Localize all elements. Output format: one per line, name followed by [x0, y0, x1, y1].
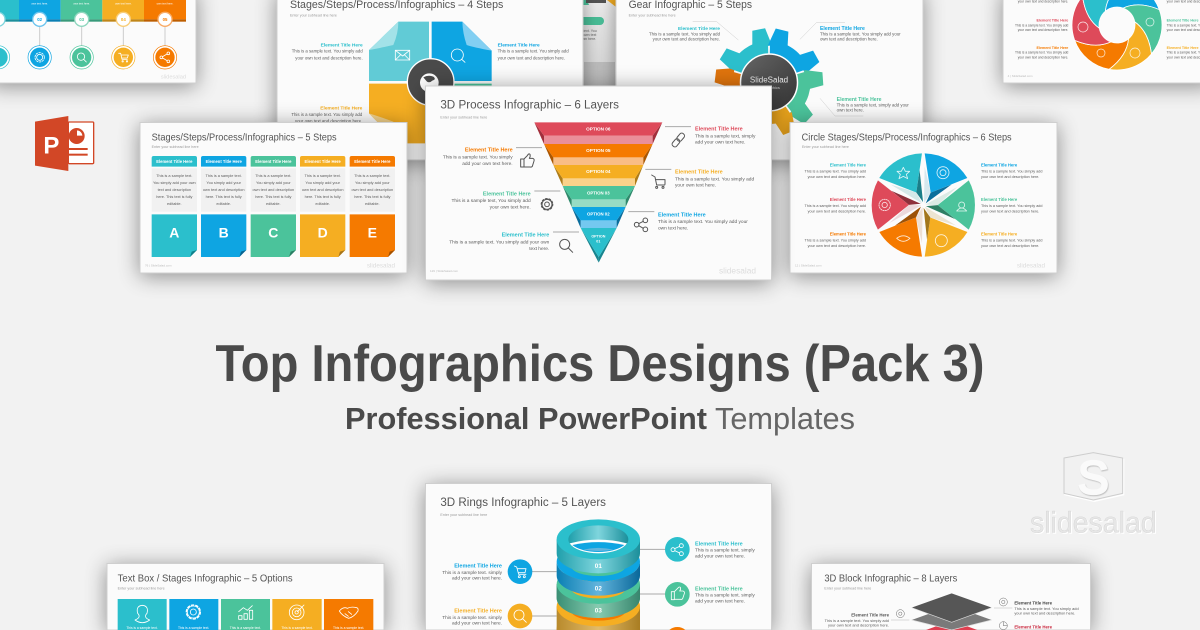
option box 5: This is a sample text. — [333, 626, 364, 630]
center globe — [407, 59, 454, 105]
right text green: This is a sample text, simply add your — [837, 102, 909, 107]
connector lines — [891, 608, 1012, 620]
swirl labels: Element Title Here — [1036, 18, 1068, 22]
panel: top-left timeline slide — [0, 0, 196, 83]
column B: You simply add your — [206, 181, 242, 185]
timeline band and icons: own text here. — [157, 2, 174, 6]
right text 2: your own text and description here. — [981, 210, 1039, 214]
left text yellow: Element Title Here — [320, 105, 363, 111]
text: left 1: add your own text here. — [452, 576, 502, 582]
yellow quadrant — [369, 84, 429, 143]
text: element 02: Element Title Here — [658, 212, 706, 218]
left text 2: Element Title Here — [830, 197, 867, 202]
timeline band and icons: 05 — [163, 17, 168, 22]
text: right 1: Element Title Here — [1014, 601, 1053, 606]
right text blue: own text and description here. — [820, 36, 878, 41]
column E: own text and description — [352, 188, 393, 192]
panel: circle stages 6 steps slide — [790, 122, 1057, 273]
watermark: slidesalad — [719, 266, 756, 276]
right text 2: Element Title Here — [981, 197, 1018, 202]
red layer — [926, 621, 977, 630]
panel: 3D process 6 layers slide — [426, 86, 772, 280]
swirl labels: This is a sample text. You simply add — [1015, 51, 1069, 55]
leader lines — [693, 22, 863, 116]
text: element 06: This is a sample text, simply — [695, 133, 756, 139]
funnel layer 03: OPTION 03 — [587, 190, 610, 195]
right text green — [837, 97, 909, 113]
text: left 1: This is a sample text. simply — [442, 570, 503, 576]
column E: editable. — [365, 202, 380, 206]
icon: PowerPoint logo: P — [43, 132, 59, 159]
funnel layer 06: OPTION 06 — [586, 127, 611, 132]
icon: link — [671, 132, 686, 148]
funnel layer 02: OPTION 02 — [587, 211, 610, 216]
left text teal: This is a sample text. You simply add — [292, 49, 363, 54]
text: element 01 — [449, 233, 550, 252]
left text 1: Element Title Here — [830, 162, 867, 167]
icon: slidesalad logo — [1030, 451, 1158, 541]
column B — [201, 156, 246, 257]
right text — [498, 42, 569, 60]
icon: right target — [999, 598, 1007, 606]
left text 1 — [804, 162, 867, 179]
panel: stages 4 steps slide — [277, 0, 583, 160]
text: right 1: This is a sample text. You simply add — [1014, 606, 1079, 611]
text: left: This is a sample text. You simply add — [825, 618, 889, 623]
gear chart: Infographics — [758, 85, 780, 90]
text: right 2: Element Title Here — [1014, 625, 1053, 630]
text: left 1: Element Title Here — [454, 563, 502, 569]
panel: gear slide — [616, 0, 923, 160]
icon: thumbs circle — [665, 582, 690, 607]
column E: Element Title Here — [354, 159, 391, 164]
icon: left target — [896, 610, 904, 618]
text: element 03 — [451, 191, 531, 211]
right text 2 — [981, 197, 1042, 214]
gear chart — [714, 28, 824, 136]
icon: gear — [541, 199, 553, 210]
column C: editable. — [266, 202, 281, 206]
column C: Element Title Here — [255, 159, 292, 164]
funnel layer 03 — [563, 186, 635, 207]
text: element 06: add your own text here. — [695, 140, 745, 146]
blue quadrant — [432, 22, 492, 81]
panel: middle strip slide behind: an here. — [583, 37, 596, 41]
watermark: slidesalad — [367, 262, 395, 269]
ring 01: 01 — [595, 563, 602, 570]
swirl labels: This is a sample text. You simply add — [1015, 23, 1069, 27]
column D: This is a sample text. — [305, 174, 341, 178]
column A: text and description — [158, 188, 191, 192]
right text blue: Element Title Here — [820, 26, 865, 32]
option box 5 — [324, 599, 373, 630]
text: element 01: Element Title Here — [502, 233, 549, 239]
subhead: Enter your subhead line here — [440, 513, 487, 517]
right text 1: your own text and description here. — [981, 175, 1039, 179]
text: element 02: own text here. — [658, 225, 688, 231]
left text 3 — [804, 231, 867, 248]
text: element 06 — [695, 126, 756, 146]
right text green: Element Title Here — [837, 97, 882, 103]
timeline band and icons — [0, 0, 186, 80]
column D — [300, 156, 345, 257]
text: element 06: Element Title Here — [695, 126, 743, 132]
column A — [152, 156, 197, 257]
text: right 1 — [1014, 601, 1079, 616]
option box 4: This is a sample text. — [281, 626, 313, 630]
swirl labels: Element Title Here — [1167, 18, 1199, 22]
ring 03: 03 — [595, 608, 602, 615]
funnel layer 01 — [581, 228, 617, 263]
right text 3: Element Title Here — [981, 231, 1018, 236]
icon: slidesalad logo: S — [1078, 452, 1110, 504]
right text: This is a sample text. You simply add — [498, 49, 569, 54]
leader lines — [516, 127, 691, 232]
text: right 2: This is a sample text. simply — [695, 593, 755, 599]
slide title: 3D Block Infographic – 8 Layers — [824, 574, 957, 585]
column D: editable. — [315, 202, 330, 206]
column B: own text and description — [203, 188, 244, 192]
funnel layer 04 — [553, 165, 643, 186]
timeline band and icons: own text here. — [115, 2, 132, 6]
text: element 01: This is a sample text. You simply add your own — [449, 239, 550, 245]
heading: main title: Top Infographics Designs (Pack 3) — [216, 335, 984, 393]
footer: 12 | SlideSalad.com — [795, 263, 822, 267]
funnel layer 05 — [544, 144, 653, 165]
right text: your own text and description here. — [498, 55, 565, 60]
text: element 02 — [658, 212, 748, 231]
swirl labels: your own text and description here. — [1018, 28, 1068, 32]
text: right 2 — [695, 586, 755, 604]
text: left: Element Title Here — [851, 613, 890, 618]
right text 1 — [981, 162, 1042, 179]
column B: B — [219, 224, 229, 240]
column E: You simply add your — [355, 181, 390, 185]
icon: orange circle — [669, 627, 685, 630]
column E: This is a sample text. — [354, 174, 390, 178]
text: left 2: add your own text here. — [452, 621, 502, 627]
left text: Element Title Here — [678, 26, 720, 32]
subhead: Enter your subhead line here — [290, 13, 337, 17]
timeline band and icons: 04 — [121, 17, 126, 22]
option box 1: This is a sample text. — [126, 626, 158, 630]
ring 02: 02 — [595, 586, 602, 593]
text: right 1: add your own text here. — [695, 553, 745, 559]
left text — [649, 26, 721, 41]
left text: your own text and description here. — [653, 36, 720, 41]
text: element 04 — [675, 169, 754, 189]
column A: A — [169, 224, 179, 240]
column D: Element Title Here — [305, 159, 341, 164]
panel: 3D block 8 layers slide — [812, 564, 1090, 630]
watermark: slidesalad — [1017, 262, 1045, 269]
panel: middle strip slide behind — [583, 0, 616, 86]
timeline band and icons: own text here. — [31, 2, 48, 6]
right text blue: This is a sample text. You simply add your — [820, 31, 901, 36]
text: element 05: This is a sample text. You simply — [443, 155, 513, 161]
text: right 2: add your own text here. — [695, 598, 745, 604]
column B: This is a sample text. — [206, 174, 242, 178]
panel: 3D rings slide — [426, 484, 772, 630]
swirl labels: Element Title Here — [1167, 46, 1199, 50]
text: element 04: Element Title Here — [675, 169, 723, 175]
option box 3: This is a sample text. — [230, 626, 261, 630]
text: left: your own text and description here. — [828, 622, 889, 627]
left text yellow — [291, 105, 363, 123]
column D: own text and description — [302, 188, 343, 192]
text: element 05: Element Title Here — [465, 148, 513, 154]
column A: You simply add your own — [153, 181, 196, 185]
left text teal — [292, 42, 363, 60]
text: left 1 — [442, 563, 503, 582]
column D: You simply add your — [305, 181, 341, 185]
column E: E — [368, 224, 377, 240]
ring 04 — [557, 586, 640, 630]
swirl labels — [1008, 0, 1200, 78]
column A: editable. — [167, 202, 182, 206]
icon: thumbs up — [521, 154, 534, 167]
column C: You simply add your — [256, 181, 291, 185]
ring 02 — [557, 542, 640, 596]
text: element 05 — [443, 148, 513, 167]
left text 2 — [804, 197, 867, 214]
column B: here. This text is fully — [206, 195, 242, 199]
teal quadrant — [369, 22, 429, 81]
funnel layer 02 — [572, 207, 626, 228]
funnel layer 06 — [534, 122, 662, 144]
gray layer — [912, 606, 992, 630]
right text green: own text here. — [837, 108, 864, 113]
column C: This is a sample text. — [255, 174, 291, 178]
icon: slidesalad logo: slidesalad — [1030, 506, 1157, 539]
green pill — [583, 17, 604, 25]
icon: PowerPoint logo — [35, 116, 94, 171]
heading: subtitle: Professional PowerPoint Templates — [345, 401, 855, 436]
slide title: Text Box / Stages Infographic – 5 Options — [118, 574, 293, 585]
star pie chart — [857, 141, 990, 269]
icon: slidesalad logo: S — [1078, 451, 1109, 503]
text: right 1: This is a sample text. simply — [695, 548, 755, 554]
column A: Element Title Here — [156, 159, 193, 164]
column B: editable. — [216, 202, 231, 206]
text: element 04: your own text here. — [675, 183, 716, 189]
icon: pie — [999, 622, 1007, 630]
column C: C — [268, 224, 278, 240]
left text 2: your own text and description here. — [808, 210, 866, 214]
text: right 1: Element Title Here — [695, 541, 743, 547]
swirl labels: 4 | SlideSalad.com — [1008, 74, 1033, 78]
watermark: slidesalad — [161, 74, 186, 80]
timeline band and icons: 02 — [37, 17, 43, 22]
icon: cart — [652, 175, 665, 188]
text: right 1: your own text and description here. — [1014, 611, 1075, 616]
text: right 1 — [695, 541, 755, 559]
left text 3: your own text and description here. — [808, 244, 866, 248]
icon: search circle — [508, 604, 532, 628]
funnel layer 01: 01 — [596, 240, 600, 244]
right text 3: your own text and description here. — [981, 244, 1039, 248]
subhead: Enter your subhead line here — [440, 115, 487, 119]
left text yellow: your own text and description here. — [295, 118, 362, 123]
green quadrant — [432, 84, 492, 143]
left text: This is a sample text. You simply add — [649, 31, 721, 36]
swirl labels: Element Title Here — [1036, 46, 1068, 50]
column A: here. This text is fully — [156, 195, 192, 199]
option box 4 — [272, 599, 322, 630]
swirl labels: your own text and description here. — [1018, 55, 1068, 59]
left text 3: This is a sample text. You simply add — [804, 238, 866, 242]
text: element 03: Element Title Here — [483, 191, 531, 197]
icon: share circle — [665, 537, 690, 562]
left text teal: your own text and description here. — [295, 55, 363, 60]
footer: 76 | SlideSalad.com — [145, 263, 172, 267]
panel: stages 5 steps slide — [140, 122, 407, 273]
icon: share — [634, 218, 648, 232]
gear chart: SlideSalad — [750, 76, 788, 84]
slide title: 3D Process Infographic – 6 Layers — [440, 97, 619, 111]
text: left 2: This is a sample text. simply — [442, 615, 503, 621]
panel: top-right swirl slide — [1003, 0, 1200, 83]
footer: 129 | SlideSalad.com — [430, 269, 459, 273]
text: right 2: Element Title Here — [695, 586, 743, 592]
text: element 01: text here. — [529, 246, 549, 252]
column B: Element Title Here — [206, 159, 242, 164]
left text 1: your own text and description here. — [808, 175, 866, 179]
right text: Element Title Here — [498, 42, 540, 48]
right text 2: This is a sample text. You simply add — [981, 204, 1042, 208]
text: left 2 — [442, 608, 503, 627]
column E — [350, 156, 395, 257]
right text 3: This is a sample text. You simply add — [981, 238, 1042, 242]
right text 1: This is a sample text. You simply add — [981, 169, 1042, 173]
text: element 03: your own text here. — [490, 205, 531, 211]
option box 1 — [118, 599, 167, 630]
timeline band and icons: 03 — [79, 17, 85, 22]
left text yellow: This is a sample text. You simply add — [291, 112, 363, 117]
panel: middle strip slide behind: text. You — [583, 29, 597, 33]
left text 3: Element Title Here — [830, 231, 867, 236]
swirl circle chart — [1065, 0, 1169, 76]
dark layer — [912, 593, 992, 622]
column C — [251, 156, 296, 257]
funnel layer 05: OPTION 05 — [586, 148, 611, 153]
timeline band and icons: own text here. — [73, 2, 90, 6]
right text blue — [820, 26, 901, 41]
panel: text box 5 options slide — [107, 564, 384, 630]
text: left — [825, 613, 890, 627]
ring 05 — [557, 609, 640, 630]
icon: cart circle — [508, 559, 532, 584]
slide title: Circle Stages/Steps/Process/Infographics – 6 Steps — [802, 132, 1012, 143]
text: element 05: add your own text here. — [462, 161, 513, 167]
slide title: Stages/Steps/Process/Infographics – 5 Steps — [152, 132, 337, 143]
ring 03 — [557, 564, 640, 618]
funnel layer 04: OPTION 04 — [586, 169, 611, 174]
text: element 03: This is a sample text, You simply add — [451, 198, 531, 204]
right text 1: Element Title Here — [981, 162, 1018, 167]
subhead: Enter your subhead line here — [824, 587, 871, 591]
left text teal: Element Title Here — [321, 42, 363, 48]
subhead: Enter your subhead line here — [118, 587, 165, 591]
subhead: Enter your subhead line here — [152, 145, 199, 149]
connector lines — [530, 549, 667, 616]
icon: slidesalad logo: slidesalad — [1031, 508, 1158, 541]
panel: middle strip slide behind: own text — [583, 33, 596, 37]
text: left 2: Element Title Here — [454, 608, 502, 614]
left text 1: This is a sample text. You simply add — [804, 169, 866, 173]
ring 01 — [557, 519, 640, 573]
text: element 02: This is a sample text. You simply add your — [658, 219, 748, 225]
right text 3 — [981, 231, 1042, 248]
text: element 04: This is a sample text. You simply add — [675, 176, 754, 182]
option box 2 — [169, 599, 218, 630]
slide title: 3D Rings Infographic – 5 Layers — [440, 495, 606, 509]
left text 2: This is a sample text. You simply add — [804, 204, 866, 208]
column D: D — [318, 224, 328, 240]
option box 2: This is a sample text. — [178, 626, 209, 630]
icon: search — [560, 239, 573, 252]
option box 3 — [221, 599, 270, 630]
column A: This is a sample text. — [156, 174, 192, 178]
column C: own text and description — [253, 188, 294, 192]
subhead: Enter your subhead line here — [629, 13, 676, 17]
funnel layer 01: OPTION — [591, 234, 606, 238]
column C: here. This text is fully — [255, 195, 291, 199]
column D: here. This text is fully — [305, 195, 341, 199]
column E: here. This text is fully — [354, 195, 390, 199]
subhead: Enter your subhead line here — [802, 145, 849, 149]
